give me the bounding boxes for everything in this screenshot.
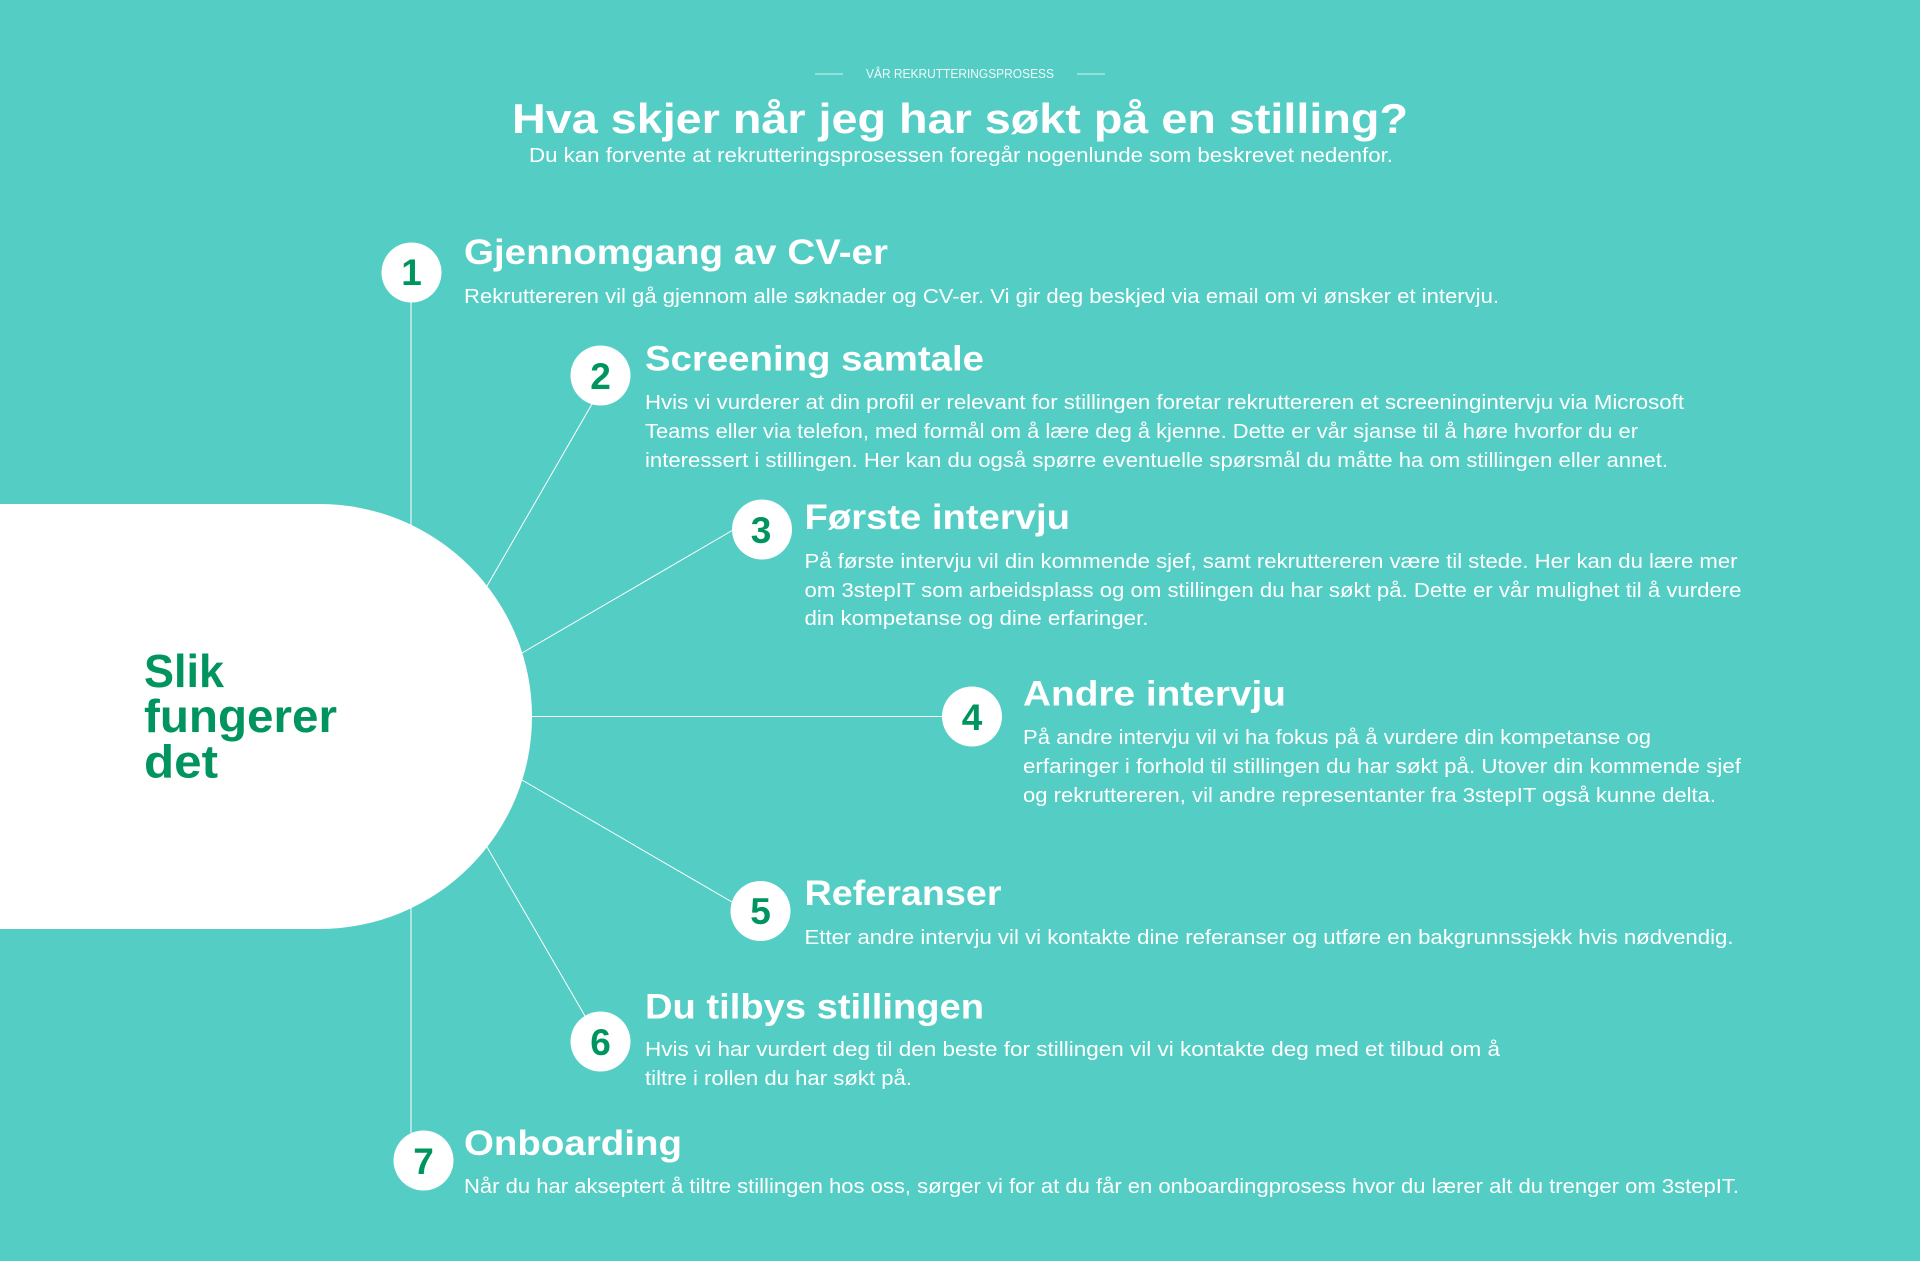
number badge 5: 5	[750, 891, 771, 932]
central white pill	[0, 504, 532, 929]
number badge 7	[394, 1130, 454, 1190]
number badge 1	[382, 242, 442, 302]
number badge 2	[570, 346, 630, 406]
eyebrow label: VÅR REKRUTTERINGSPROSESS	[866, 66, 1054, 81]
step 4	[942, 674, 1741, 807]
number badge 1: 1	[401, 252, 422, 293]
description 2	[645, 391, 1684, 472]
title: Hva skjer når jeg har søkt på en stilling?	[512, 95, 1408, 142]
step 7	[394, 1124, 1739, 1198]
heading 1: Gjennomgang av CV-er	[464, 233, 888, 272]
header	[512, 66, 1408, 167]
number badge 6: 6	[590, 1022, 611, 1063]
pill heading: fungerer	[144, 690, 337, 742]
description 4: erfaringer i forhold til stillingen du har søkt på. Utover din kommende sjef	[1023, 755, 1741, 778]
heading 4: Andre intervju	[1023, 674, 1286, 714]
description 3: om 3stepIT som arbeidsplass og om stillingen du har søkt på. Dette er vår mulighet til å vurdere	[804, 579, 1742, 602]
description 4: og rekruttereren, vil andre representanter fra 3stepIT også kunne delta.	[1023, 784, 1716, 807]
number badge 6	[570, 1012, 630, 1072]
description 7: Når du har akseptert å tiltre stillingen hos oss, sørger vi for at du får en onboardingprosess hvor du lærer alt du trenger om 3stepIT.	[464, 1175, 1739, 1198]
number badge 2: 2	[590, 356, 611, 397]
description 2: interessert i stillingen. Her kan du også spørre eventuelle spørsmål du måtte ha om stillingen eller annet.	[645, 449, 1668, 472]
pill heading: det	[144, 736, 218, 788]
step 3	[732, 498, 1742, 630]
pill heading	[144, 645, 337, 788]
number badge 5	[730, 881, 790, 941]
connector lines	[411, 302, 943, 1133]
pill heading: Slik	[144, 645, 224, 697]
description 1: Rekruttereren vil gå gjennom alle søknader og CV-er. Vi gir deg beskjed via email om vi ønsker et intervju.	[464, 285, 1499, 308]
subtitle: Du kan forvente at rekrutteringsprosessen foregår nogenlunde som beskrevet nedenfor.	[529, 144, 1393, 167]
step 2	[570, 340, 1684, 472]
heading 3: Første intervju	[804, 498, 1070, 537]
description 6: Hvis vi har vurdert deg til den beste for stillingen vil vi kontakte deg med et tilbud om å	[645, 1038, 1501, 1061]
description 5: Etter andre intervju vil vi kontakte dine referanser og utføre en bakgrunnssjekk hvis nødvendig.	[804, 926, 1734, 949]
step 5	[730, 874, 1734, 949]
description 4	[1023, 726, 1741, 807]
description 3	[804, 550, 1742, 630]
heading 7: Onboarding	[464, 1124, 682, 1163]
number badge 4: 4	[962, 697, 983, 738]
heading 6: Du tilbys stillingen	[645, 988, 984, 1026]
description 4: På andre intervju vil vi ha fokus på å vurdere din kompetanse og	[1023, 726, 1651, 749]
description 3: din kompetanse og dine erfaringer.	[804, 607, 1148, 630]
heading 5: Referanser	[804, 874, 1002, 913]
description 3: På første intervju vil din kommende sjef, samt rekruttereren være til stede. Her kan du lære mer	[804, 550, 1738, 573]
description 6: tiltre i rollen du har søkt på.	[645, 1067, 912, 1090]
number badge 7: 7	[413, 1141, 434, 1182]
heading 2: Screening samtale	[645, 340, 984, 378]
number badge 3	[732, 500, 792, 560]
description 2: Teams eller via telefon, med formål om å lære deg å kjenne. Dette er vår sjanse til å høre hvorfor du er	[645, 420, 1638, 443]
number badge 3: 3	[751, 510, 771, 551]
step 1	[382, 233, 1499, 308]
number badge 4	[942, 686, 1002, 746]
description 6	[645, 1038, 1501, 1090]
description 2: Hvis vi vurderer at din profil er relevant for stillingen foretar rekruttereren et screeningintervju via Microsoft	[645, 391, 1684, 414]
step 6	[570, 988, 1501, 1090]
